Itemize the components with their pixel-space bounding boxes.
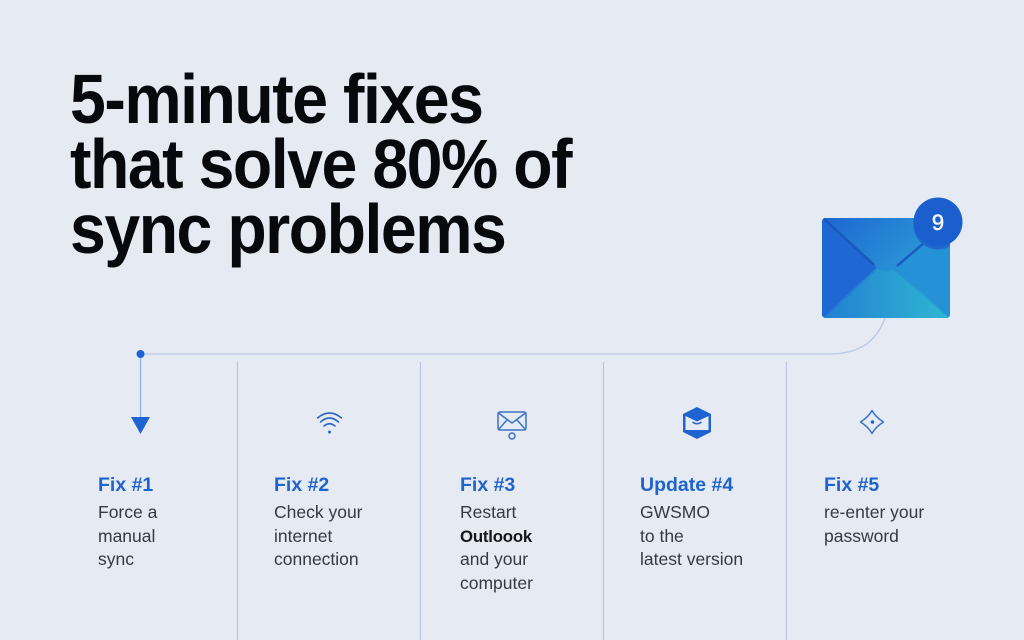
icon: hexagon package: [683, 407, 711, 439]
text: fix 5: password: [824, 526, 899, 546]
text: fix 5: re-enter your: [824, 502, 924, 522]
text: update 4: latest version: [640, 549, 743, 569]
text: fix 3: Restart: [460, 502, 516, 522]
text: fix 3: Outloook: [460, 526, 532, 546]
text: update 4: GWSMO: [640, 502, 710, 522]
text: update 4: to the: [640, 526, 684, 546]
panel: fix 3: [460, 474, 533, 592]
text: update 4: [640, 502, 743, 569]
heading: fix 2: Fix #2: [274, 474, 329, 496]
badge: 9: [932, 210, 944, 235]
connector line from envelope to first fix: [136, 318, 885, 420]
badge: [914, 198, 962, 246]
text: fix 3: [460, 502, 533, 592]
panel: update 4: [640, 474, 743, 569]
title: that solve 80% of: [70, 125, 571, 203]
icon: mail: [498, 412, 526, 439]
panel: fix 5: [824, 474, 924, 546]
text: fix 5: [824, 502, 924, 546]
panel: fix 2: [274, 474, 363, 569]
heading: update 4: Update #4: [640, 474, 733, 496]
icon: envelope with badge: [822, 198, 962, 318]
icon: diamond spark: [860, 410, 884, 434]
heading: fix 1: Fix #1: [98, 474, 153, 496]
heading: fix 3: Fix #3: [460, 474, 515, 496]
title: 5-minute fixes: [70, 60, 482, 138]
text: fix 2: Check your: [274, 502, 363, 522]
text: fix 2: [274, 502, 363, 569]
text: fix 1: manual: [98, 526, 155, 546]
title: [70, 60, 573, 268]
arrow head: [131, 417, 150, 434]
text: fix 1: sync: [98, 549, 134, 569]
panel: fix 1: [98, 474, 158, 569]
text: fix 1: Force a: [98, 502, 157, 522]
icon: wifi: [318, 413, 342, 434]
text: fix 2: connection: [274, 549, 359, 569]
title: sync problems: [70, 190, 505, 268]
text: fix 3: and your: [460, 549, 528, 569]
heading: fix 5: Fix #5: [824, 474, 879, 496]
text: fix 1: [98, 502, 158, 569]
text: fix 2: internet: [274, 526, 332, 546]
text: fix 3: computer: [460, 572, 533, 592]
divider lines: [238, 362, 786, 640]
